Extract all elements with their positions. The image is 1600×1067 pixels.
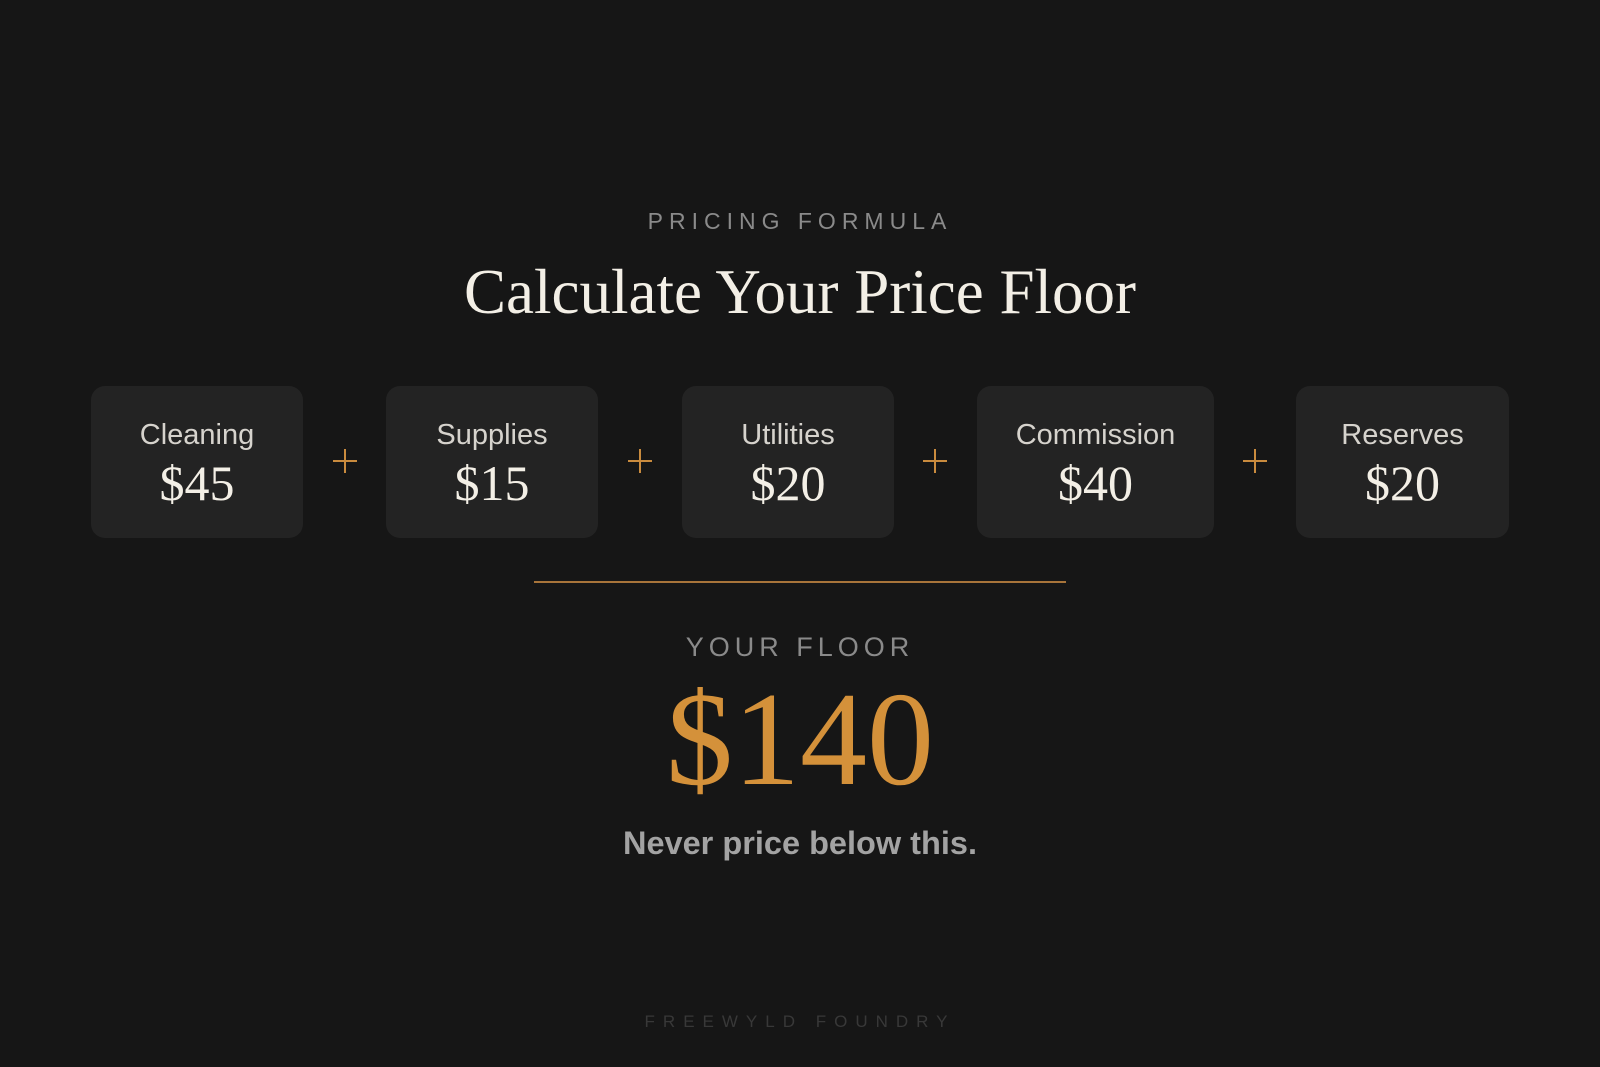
- eyebrow: PRICING FORMULA: [648, 208, 952, 234]
- card: reserves: Reserves: [1341, 419, 1464, 451]
- card: cleaning: $45: [160, 455, 234, 511]
- footer: FREEWYLD FOUNDRY: [645, 1012, 955, 1031]
- card: commission: $40: [1058, 455, 1133, 511]
- title: Calculate Your Price Floor: [464, 257, 1136, 327]
- card: supplies: [386, 386, 598, 538]
- card: cleaning: Cleaning: [140, 419, 254, 451]
- card: utilities: [682, 386, 894, 538]
- result label: YOUR FLOOR: [686, 632, 914, 662]
- plus: [1243, 449, 1267, 473]
- plus: [923, 449, 947, 473]
- tagline: Never price below this.: [623, 825, 977, 861]
- result value: $140: [666, 665, 934, 813]
- sum line: [534, 581, 1066, 583]
- plus: [333, 449, 357, 473]
- card: supplies: Supplies: [436, 419, 548, 451]
- plus: [628, 449, 652, 473]
- card: utilities: $20: [750, 455, 826, 511]
- card: reserves: $20: [1365, 455, 1440, 511]
- card: cleaning: [91, 386, 303, 538]
- card: commission: [977, 386, 1214, 538]
- card: utilities: Utilities: [741, 419, 835, 451]
- card: supplies: $15: [454, 455, 530, 511]
- card: commission: Commission: [1016, 419, 1175, 451]
- card: reserves: [1296, 386, 1509, 538]
